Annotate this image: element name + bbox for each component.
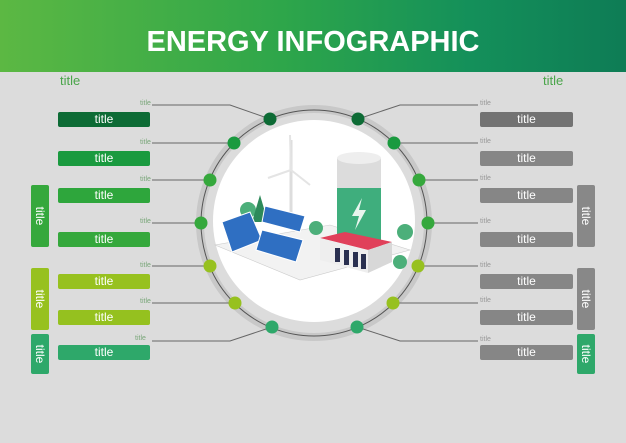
- text: title: [517, 188, 536, 202]
- text: title: [517, 112, 536, 126]
- text: title: [95, 274, 113, 288]
- text: title: [135, 335, 146, 342]
- heading right: title: [543, 73, 563, 88]
- text: title: [480, 138, 491, 145]
- text: title: [480, 100, 491, 107]
- text: title: [33, 290, 47, 308]
- illustration: energy scene: [215, 135, 413, 280]
- text: title: [95, 232, 113, 246]
- heading left: title: [60, 73, 80, 88]
- title: ENERGY INFOGRAPHIC: [146, 26, 480, 58]
- text: title: [140, 262, 151, 269]
- text: title: [140, 139, 151, 146]
- text: title: [579, 345, 593, 363]
- text: title: [579, 207, 593, 225]
- text: title: [95, 188, 113, 202]
- text: title: [517, 274, 536, 288]
- small labels: [135, 100, 491, 343]
- text: title: [480, 175, 491, 182]
- text: title: [140, 176, 151, 183]
- text: title: [33, 345, 47, 363]
- text: title: [480, 262, 491, 269]
- right side tabs: [577, 185, 595, 374]
- text: title: [33, 207, 47, 225]
- text: title: [140, 298, 151, 305]
- text: title: [579, 290, 593, 308]
- text: title: [140, 100, 151, 107]
- text: title: [480, 336, 491, 343]
- text: title: [517, 310, 536, 324]
- dots: [194, 112, 434, 334]
- right bars: [480, 112, 573, 360]
- text: title: [517, 345, 536, 359]
- text: title: [517, 151, 536, 165]
- left side tabs: [31, 185, 49, 374]
- header banner: [0, 0, 626, 72]
- text: title: [95, 310, 113, 324]
- text: title: [140, 218, 151, 225]
- left bars: [58, 112, 150, 360]
- text: title: [95, 151, 113, 165]
- text: title: [95, 112, 113, 126]
- text: title: [480, 297, 491, 304]
- text: title: [517, 232, 536, 246]
- text: title: [480, 218, 491, 225]
- text: title: [95, 345, 113, 359]
